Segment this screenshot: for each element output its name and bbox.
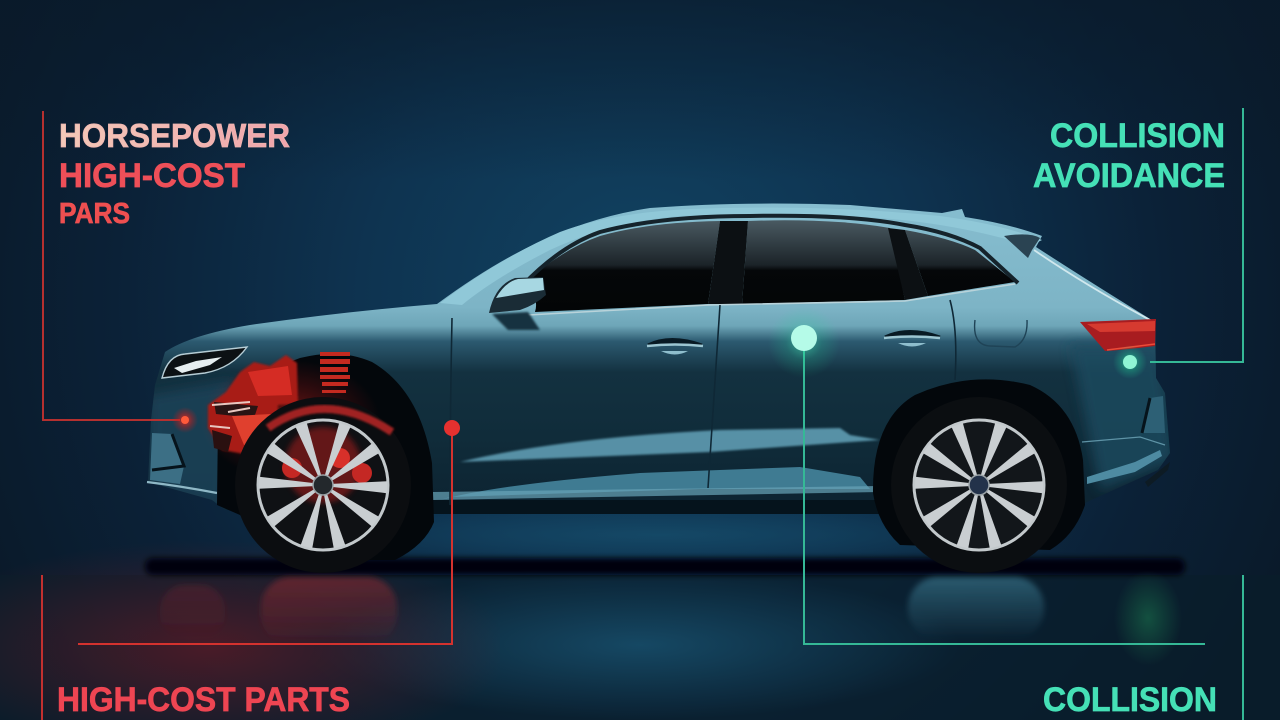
heading: high-cost parts: HIGH-COST PARTS <box>57 681 350 719</box>
heading: collision: COLLISION <box>1043 681 1217 719</box>
exposed engine parts <box>200 352 380 480</box>
tail light <box>1080 319 1156 351</box>
fender and nose shading <box>148 345 1175 510</box>
floor reflections and shadow <box>145 558 1185 666</box>
door seams <box>450 300 956 505</box>
side mirror <box>489 277 546 313</box>
lower door reflection <box>460 428 880 462</box>
heading: horsepower high-cost parts <box>59 117 290 230</box>
front wheel <box>235 397 411 573</box>
rear quarter vent <box>1004 234 1040 258</box>
roof highlight <box>440 208 1042 305</box>
callout: horsepower lines <box>43 111 198 433</box>
heading: collision avoidance: AVOIDANCE <box>1033 157 1225 195</box>
headlight <box>162 347 247 378</box>
heading: collision avoidance <box>1033 117 1225 195</box>
callout: collision avoidance tail sensor line <box>1113 108 1243 379</box>
door handles <box>647 332 940 354</box>
callout: door sensor line <box>768 306 1243 720</box>
rear bumper details <box>1082 437 1165 445</box>
car <box>147 204 1175 573</box>
car body <box>148 204 1170 513</box>
fuel door <box>975 320 1027 347</box>
lower grille <box>150 433 184 484</box>
front wheel arch <box>217 354 434 560</box>
heading: horsepower high-cost parts: PARS <box>59 198 130 230</box>
heading: horsepower high-cost parts: HORSEPOWER <box>59 117 290 154</box>
heading: horsepower high-cost parts: HIGH-COST <box>59 157 245 195</box>
heading: collision avoidance: COLLISION <box>1050 117 1225 155</box>
rear wheel arch <box>873 379 1085 550</box>
side windows <box>510 216 1018 316</box>
rear wheel <box>891 397 1067 573</box>
mirror shadow <box>492 312 540 330</box>
callout: high-cost parts line <box>42 420 460 720</box>
